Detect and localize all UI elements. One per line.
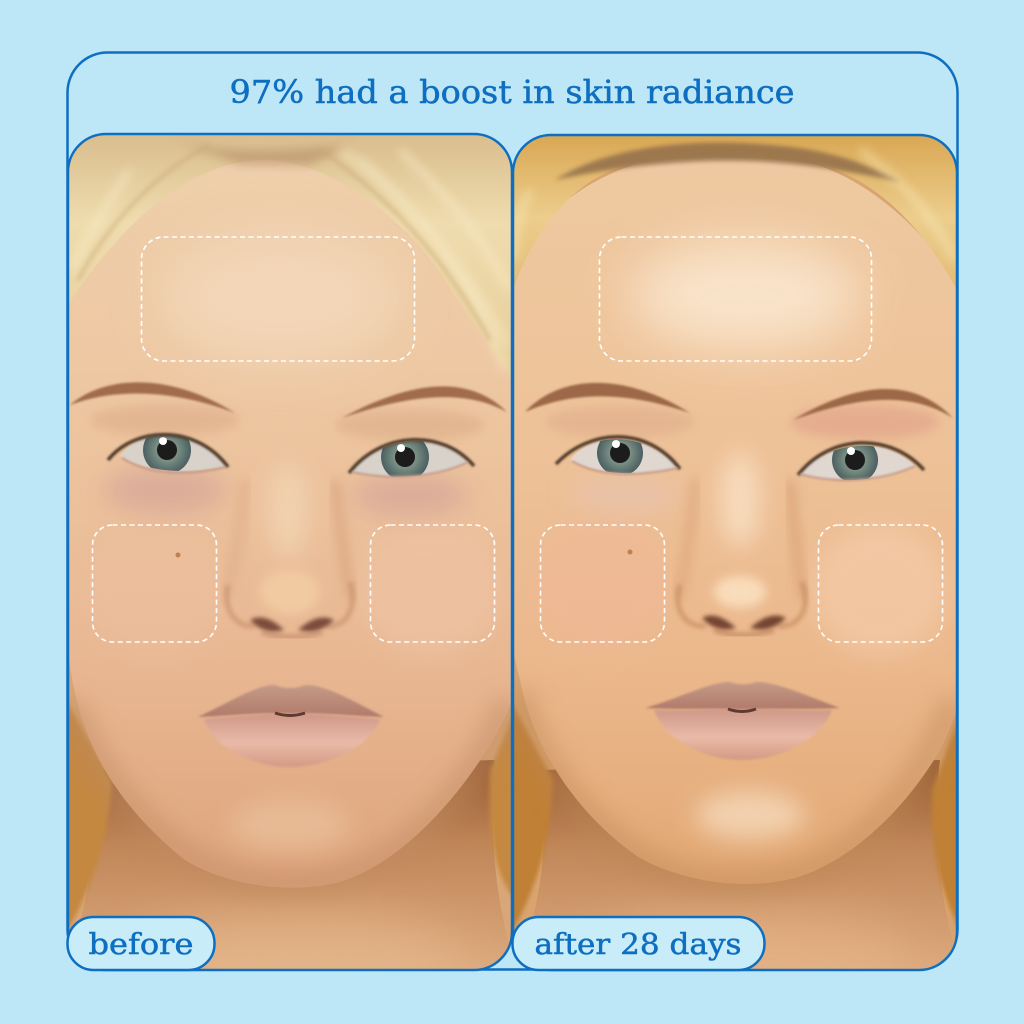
label: after 28 days xyxy=(512,917,764,970)
hair top xyxy=(69,135,511,332)
dashed highlight regions xyxy=(92,237,942,642)
face xyxy=(55,155,525,888)
lips xyxy=(645,682,840,760)
mole xyxy=(176,552,180,558)
eyes xyxy=(106,431,476,478)
eye sockets xyxy=(103,466,227,514)
header frame xyxy=(68,52,958,970)
jaw shadow xyxy=(70,700,510,886)
neck xyxy=(81,760,506,932)
panel: before photo xyxy=(69,135,511,969)
eye sockets xyxy=(550,407,690,436)
neck xyxy=(520,760,960,970)
panel: after photo xyxy=(514,134,956,969)
neck lower glow xyxy=(681,910,872,966)
jaw shadow xyxy=(518,690,955,884)
label: before xyxy=(68,917,214,970)
title: 97% had a boost in skin radiance xyxy=(230,73,794,111)
mole xyxy=(628,550,632,554)
cheek tint xyxy=(85,525,225,655)
photo outlines xyxy=(68,134,957,970)
nose xyxy=(226,462,352,637)
label: after 28 days: after 28 days xyxy=(534,927,742,961)
chin highlight xyxy=(230,800,350,850)
neck lower glow xyxy=(200,906,446,968)
nose xyxy=(678,452,805,635)
hair top xyxy=(514,136,956,288)
cheek tint xyxy=(532,520,668,650)
eyebrows xyxy=(525,383,690,413)
lower hair xyxy=(505,690,965,930)
forehead highlight xyxy=(160,235,400,365)
lips xyxy=(198,685,384,767)
chin shine xyxy=(695,791,805,839)
eyebrows xyxy=(70,382,235,413)
lower hair xyxy=(60,690,515,930)
face xyxy=(500,150,970,884)
eyes xyxy=(554,434,926,482)
label: before: before xyxy=(88,927,194,961)
forehead shine xyxy=(630,240,860,350)
